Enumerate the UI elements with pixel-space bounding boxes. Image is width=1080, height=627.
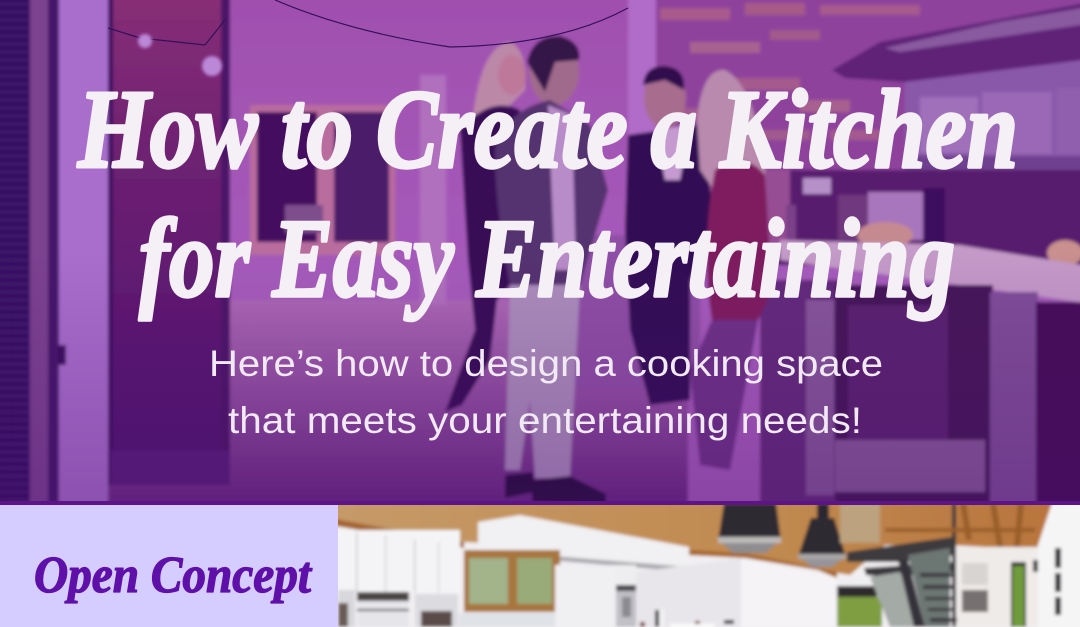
white wall bbox=[636, 558, 741, 627]
counter bottles bbox=[640, 610, 734, 627]
island bbox=[575, 235, 700, 390]
woman in red dress bbox=[690, 70, 772, 470]
man in suit bbox=[495, 36, 608, 504]
lower hero shading bbox=[29, 304, 1037, 501]
kitchen photo bbox=[330, 495, 1080, 627]
woman with blonde hair bbox=[445, 42, 526, 412]
backsplash bbox=[775, 170, 1080, 265]
man in waistcoat bbox=[625, 66, 715, 405]
subtitle line 1: Here’s how to design a cooking space bbox=[209, 343, 883, 384]
title bbox=[77, 68, 1018, 321]
glazed opening above stairs bbox=[840, 503, 880, 543]
dark door bbox=[108, 0, 230, 485]
pale column bbox=[627, 0, 658, 138]
heading: open concept: Open Concept bbox=[34, 547, 312, 604]
pictures and doorway bbox=[962, 560, 1039, 627]
counter items bbox=[786, 188, 1080, 266]
subway tile backsplash bbox=[459, 613, 570, 627]
far right wall with frames bbox=[1035, 505, 1063, 617]
ceiling hood box bbox=[475, 512, 692, 557]
string lights bbox=[108, 0, 628, 47]
pendant lamp 2 bbox=[798, 503, 846, 567]
green outside view bbox=[837, 597, 882, 627]
metal staircase bbox=[847, 503, 963, 627]
wooden window bbox=[464, 550, 560, 612]
ovens bbox=[338, 590, 458, 627]
left shutter and door frame bbox=[0, 0, 108, 524]
pendant lamp 1 bbox=[718, 503, 781, 553]
subtitle line 2: that meets your entertaining needs! bbox=[228, 400, 862, 441]
counter bbox=[780, 240, 1080, 305]
back wall window bbox=[250, 75, 446, 305]
right white wall bbox=[957, 547, 1040, 627]
white upper cabinets bbox=[356, 526, 463, 592]
range hood bbox=[832, 0, 1080, 172]
section divider band bbox=[0, 501, 1080, 505]
party guests bbox=[445, 36, 772, 504]
stove and cabinets bbox=[760, 280, 1080, 524]
white wall and column bbox=[555, 565, 617, 627]
wooden ceiling bbox=[338, 505, 1055, 577]
ceiling beams right bbox=[885, 503, 1035, 547]
floor bbox=[108, 300, 688, 524]
subtitle bbox=[209, 343, 883, 441]
coffee machine bbox=[616, 585, 636, 627]
brick wall bbox=[656, 0, 1080, 170]
panel: open concept label bbox=[0, 505, 338, 627]
